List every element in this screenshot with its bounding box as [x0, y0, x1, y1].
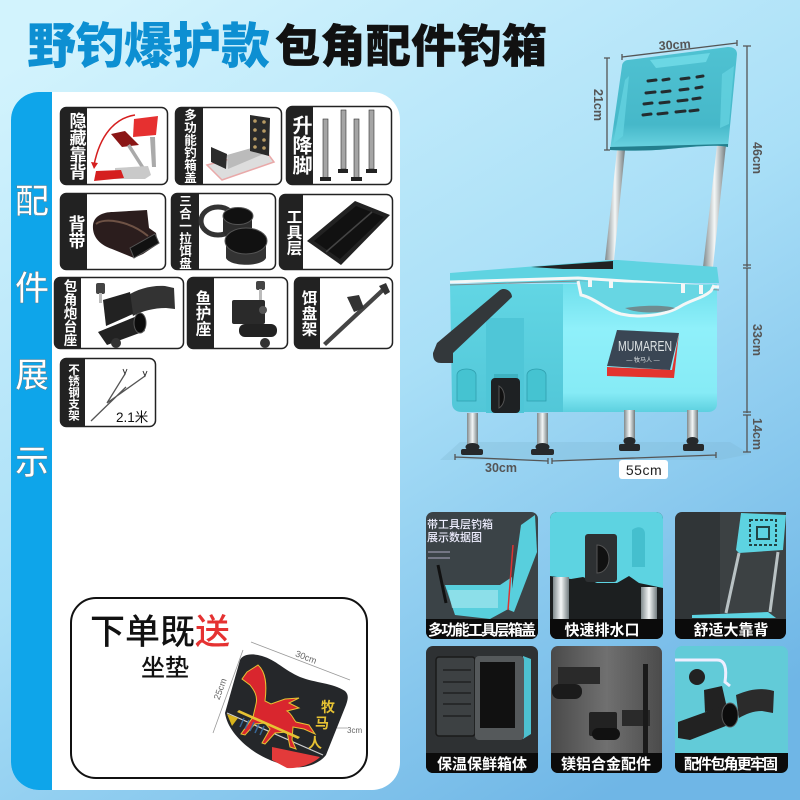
title: 包角配件钓箱 — [275, 21, 547, 72]
feature card: 配件包角更牢固 — [675, 646, 788, 773]
feature card: 多功能工具层箱盖: 多功能工具层箱盖 — [428, 621, 536, 639]
tile: 鱼护座: 鱼护座 — [194, 288, 211, 336]
feature card: 多功能工具层箱盖 — [426, 512, 538, 639]
dimension: backrest width 30cm — [622, 37, 737, 60]
tile: 多功能钓箱盖 — [175, 107, 282, 185]
latches — [457, 369, 546, 401]
dimension: 14cm — [743, 415, 764, 452]
cushion illustration: 25cm — [212, 677, 229, 701]
legs — [461, 410, 704, 455]
feature card: 舒适大靠背 — [675, 512, 786, 639]
ground shadow — [440, 442, 750, 460]
feature card: 镁铝合金配件: 镁铝合金配件 — [561, 755, 651, 773]
backrest poles — [605, 145, 726, 267]
title — [27, 20, 547, 74]
drain valve — [491, 374, 520, 413]
cushion illustration: 3cm — [347, 726, 362, 735]
feature card: 配件包角更牢固: 配件包角更牢固 — [684, 755, 778, 773]
tile: 不锈钢支架 2.1米: 2.1米 — [116, 410, 149, 425]
dimension: 14cm: 14cm — [750, 418, 764, 450]
dimension: backrest height 21cm: 21cm — [591, 89, 605, 121]
gift subheading: 坐垫 — [141, 655, 189, 682]
tile: 背带 — [60, 193, 166, 270]
feature card: 保温保鲜箱体 — [426, 646, 538, 773]
tile: 隐藏靠背: 隐藏靠背 — [66, 112, 86, 181]
tile: 三合一拉饵盘 — [171, 193, 276, 270]
tile: 包角炮台座 — [54, 277, 184, 349]
dimension: length 55cm: 55cm — [626, 462, 662, 478]
tile: 三合一拉饵盘: 三合一拉饵盘 — [177, 194, 191, 270]
sidebar heading: 配件展示 — [11, 92, 52, 790]
backrest — [610, 47, 737, 151]
gift heading: 下单既送 — [90, 613, 230, 652]
tile: 工具层: 工具层 — [284, 209, 302, 256]
dimension: 33cm: 33cm — [750, 324, 764, 356]
box body — [450, 260, 719, 413]
tile: 不锈钢支架 2.1米 — [60, 358, 156, 427]
dimension: backrest width 30cm: 30cm — [658, 37, 691, 53]
tile: 升降脚 — [286, 106, 392, 185]
feature card: 快速排水口: 快速排水口 — [564, 621, 640, 639]
feature card: 多功能工具层箱盖: 带工具层钓箱 — [427, 517, 493, 531]
feature card: 舒适大靠背: 舒适大靠背 — [693, 621, 769, 639]
feature card: 多功能工具层箱盖: 展示数据图 — [427, 530, 482, 544]
tile: 饵盘架: 饵盘架 — [300, 289, 317, 337]
tile: 背带: 背带 — [66, 215, 85, 249]
cushion illustration: 人 — [308, 735, 322, 751]
handle — [433, 289, 512, 363]
tile: 隐藏靠背 — [60, 107, 168, 185]
cushion illustration: 30cm — [294, 649, 318, 666]
tile: 多功能钓箱盖: 多功能钓箱盖 — [182, 108, 196, 184]
sidebar heading: 配件展示: 配 — [15, 183, 49, 221]
title: 野钓爆护款 — [27, 20, 270, 74]
cushion illustration — [212, 642, 362, 768]
panel: accessories — [11, 92, 400, 790]
white panel background — [11, 92, 400, 790]
dimension: 33cm — [743, 268, 764, 413]
brand label — [607, 330, 679, 378]
dimension: width 30cm — [455, 454, 548, 475]
sidebar heading: 配件展示: 示 — [15, 444, 49, 482]
dimension: width 30cm: 30cm — [485, 461, 517, 475]
tile: 饵盘架 — [294, 277, 392, 349]
tile: 升降脚: 升降脚 — [289, 115, 312, 176]
feature card: 快速排水口 — [550, 512, 663, 639]
dimension: length 55cm — [552, 452, 716, 479]
tile: 不锈钢支架 2.1米: 不锈钢支架 — [67, 363, 80, 421]
tile: 鱼护座 — [187, 277, 288, 349]
feature card: 镁铝合金配件 — [551, 646, 662, 773]
dimension: 46cm: 46cm — [750, 142, 764, 174]
brand label: MUMAREN — [618, 338, 672, 355]
gift box — [71, 598, 367, 778]
sidebar heading: 配件展示: 展 — [15, 357, 49, 395]
feature card: 保温保鲜箱体: 保温保鲜箱体 — [437, 755, 527, 773]
cushion illustration: 牧 — [321, 699, 335, 715]
cushion illustration: 马 — [315, 715, 329, 731]
dimension: 46cm — [743, 46, 764, 267]
brand label: — 牧马人 — — [626, 356, 660, 364]
product: fishing box with backrest — [433, 37, 764, 479]
tile: 包角炮台座: 包角炮台座 — [62, 278, 77, 347]
dimension: backrest height 21cm — [591, 58, 610, 150]
sidebar heading: 配件展示: 件 — [15, 270, 49, 308]
tile: 工具层 — [279, 194, 392, 270]
